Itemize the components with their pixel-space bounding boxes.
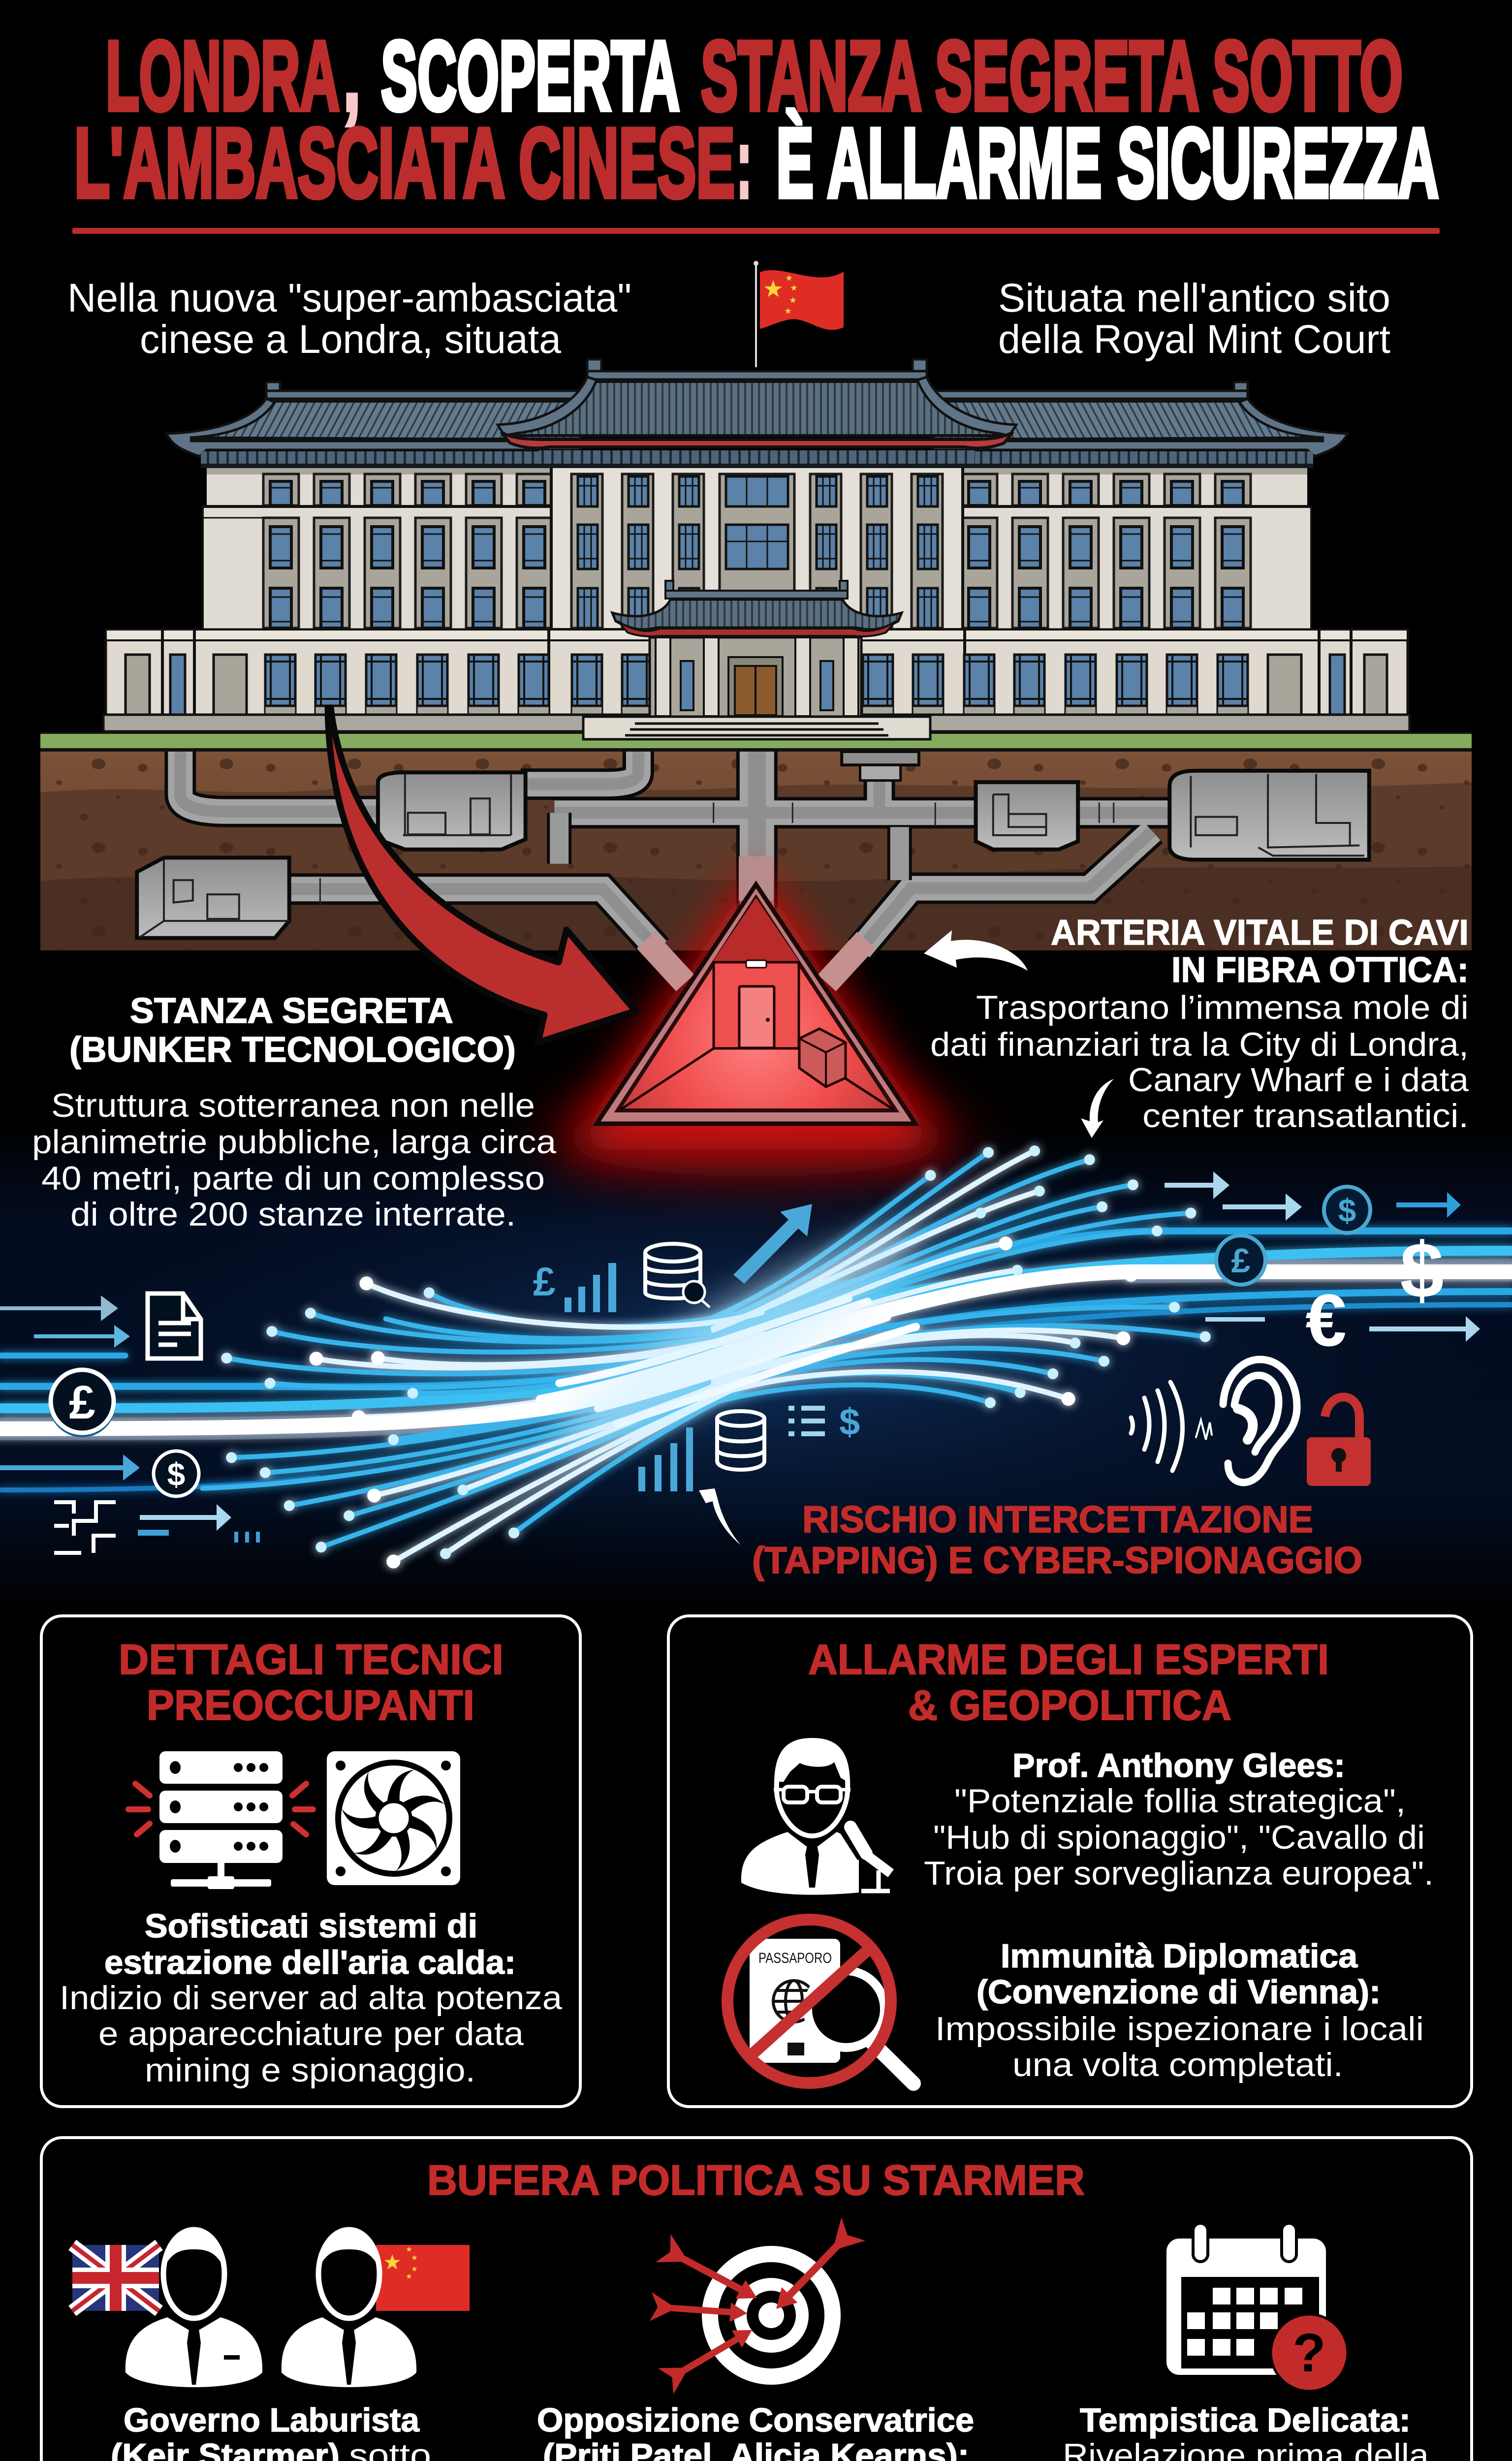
- roofs: [166, 359, 1348, 468]
- crate: [799, 1029, 846, 1087]
- icon: calendar with question mark: [1166, 2223, 1348, 2391]
- column: governo laburista: Governo Laburista: [124, 2401, 420, 2439]
- icon: large dollar: $: [1400, 1226, 1444, 1314]
- label: arteria fibra ottica: Trasportano l’immensa mole di: [976, 989, 1469, 1026]
- big red arrow to secret room: [328, 708, 635, 1042]
- icon: pound coin: £: [69, 1376, 95, 1429]
- arrow: curved white to pyramid: [924, 930, 1028, 971]
- panel: bufera politica: [41, 2138, 1472, 2461]
- icon: calendar with question mark: ?: [1292, 2323, 1326, 2383]
- portico and entrance: [583, 581, 930, 739]
- label: rischio intercettazione: [752, 1499, 1362, 1581]
- icon: pound coin: [1216, 1235, 1265, 1285]
- arrow: curved white down to fibres: [1081, 1079, 1114, 1138]
- icons: data glyphs centre bottom: [638, 1401, 860, 1491]
- column: tempistica delicata: Tempistica Delicata:: [1080, 2401, 1411, 2439]
- fibre section background: [0, 1122, 1512, 1614]
- secret room pyramid: [597, 884, 915, 1124]
- title: ,: [344, 21, 360, 131]
- icons: data flows left: [0, 1294, 260, 1553]
- label: stanza segreta: STANZA SEGRETA: [130, 991, 453, 1031]
- text: immunita: [935, 1937, 1424, 2083]
- text block: Indizio di server ad alta potenza: [60, 1979, 562, 2017]
- room interior: [621, 960, 893, 1109]
- text: prof glees: "Hub di spionaggio", "Cavallo di: [933, 1819, 1425, 1856]
- icon: server rack: [128, 1751, 313, 1889]
- tunnels: [137, 752, 1369, 949]
- icon: uk politician: [126, 2230, 262, 2387]
- icon: dollar coin: [154, 1451, 199, 1496]
- lower storey: [103, 630, 1410, 731]
- icon: prohibited passport and magnifier: PASSAPORO: [758, 1950, 832, 1966]
- upper wings: [203, 465, 1311, 630]
- text block: Sofisticati sistemi di: [145, 1907, 477, 1945]
- intro text left: [67, 276, 631, 362]
- icon: dollar coin: [1324, 1187, 1370, 1233]
- text block: [60, 1907, 562, 2089]
- heading: [808, 1636, 1329, 1729]
- heading: BUFERA POLITICA SU STARMER: [427, 2157, 1085, 2204]
- icon: china flag: [376, 2245, 470, 2311]
- icon: document: [148, 1294, 201, 1358]
- intro text left: cinese a Londra, situata: [140, 317, 561, 362]
- icon: target with arrows: [650, 2217, 865, 2394]
- heading: DETTAGLI TECNICI: [119, 1636, 504, 1683]
- label: arteria fibra ottica: [930, 913, 1469, 1135]
- sound waves: [1131, 1382, 1212, 1471]
- red glow around secret room: [569, 871, 943, 1149]
- label: rischio intercettazione: (TAPPING) E CYBER-SPIONAGGIO: [752, 1540, 1362, 1581]
- heading: & GEOPOLITICA: [908, 1682, 1231, 1729]
- icon: expert with microphone: [741, 1740, 891, 1895]
- label: arteria fibra ottica: dati finanziari tra la City di Londra,: [930, 1026, 1469, 1063]
- panel: allarme esperti: [668, 1616, 1472, 2107]
- icons: data glyphs centre top: [533, 1204, 812, 1312]
- text block: estrazione dell'aria calda:: [104, 1944, 516, 1981]
- arrow: curved white to tapping label: [699, 1488, 741, 1545]
- intro text right: della Royal Mint Court: [998, 317, 1390, 362]
- title: SCOPERTA: [381, 21, 680, 131]
- text: immunita: (Convenzione di Vienna):: [976, 1973, 1381, 2011]
- label: stanza segreta: di oltre 200 stanze interrate.: [70, 1196, 516, 1233]
- lock: [1307, 1397, 1371, 1486]
- title: LONDRA: [106, 21, 340, 131]
- icon: uk flag: [72, 2245, 159, 2311]
- intro text right: [998, 276, 1390, 362]
- icon: prohibited passport and magnifier: [727, 1920, 914, 2083]
- label: arteria fibra ottica: Canary Wharf e i data: [1128, 1061, 1469, 1099]
- icon: ear with sound waves and lock: [1131, 1359, 1371, 1486]
- label: arteria fibra ottica: IN FIBRA OTTICA:: [1171, 950, 1469, 990]
- intro text right: Situata nell'antico sito: [998, 276, 1390, 320]
- label: rischio intercettazione: RISCHIO INTERCETTAZIONE: [802, 1499, 1313, 1541]
- icon: rising arrow: [733, 1204, 812, 1284]
- embassy building: [103, 359, 1410, 739]
- text: immunita: una volta completati.: [1012, 2046, 1343, 2083]
- icon: data circuit glyph: [54, 1502, 116, 1553]
- label: stanza segreta: 40 metri, parte di un complesso: [41, 1160, 545, 1197]
- text: immunita: Immunità Diplomatica: [1001, 1937, 1358, 1975]
- soil and underground tunnels: [40, 752, 1472, 950]
- icons: currency and flow right: [1165, 1171, 1480, 1361]
- icon: database: [717, 1411, 764, 1470]
- icon: database with magnifier: [645, 1244, 710, 1307]
- grass strip: [40, 732, 1472, 752]
- label: stanza segreta: Struttura sotterranea non nelle: [51, 1087, 535, 1124]
- central block: [551, 465, 963, 630]
- column: tempistica delicata: [1046, 2401, 1447, 2461]
- title: :: [737, 108, 752, 218]
- text: prof glees: "Potenziale follia strategica",: [954, 1782, 1406, 1820]
- title: L'AMBASCIATA CINESE: [74, 108, 735, 218]
- icon: pound coin: [49, 1370, 116, 1437]
- text: prof glees: [924, 1747, 1434, 1892]
- icon: china politician: [282, 2230, 416, 2387]
- text: prof glees: Prof. Anthony Glees:: [1012, 1747, 1345, 1784]
- icon: dollar coin: $: [1338, 1192, 1356, 1229]
- icon: china flag on pole: [754, 261, 844, 367]
- label: stanza segreta: (BUNKER TECNOLOGICO): [69, 1030, 516, 1070]
- fibre optic cable bundle: [0, 1151, 1512, 1562]
- flow arrows left: [0, 1295, 260, 1543]
- icons: data glyphs centre bottom: $: [839, 1401, 860, 1443]
- heading: ALLARME DEGLI ESPERTI: [808, 1636, 1329, 1683]
- heading: PREOCCUPANTI: [147, 1682, 474, 1729]
- column: governo laburista: [111, 2401, 431, 2461]
- icon: dollar coin: $: [167, 1456, 185, 1492]
- intro text left: Nella nuova "super-ambasciata": [67, 276, 631, 320]
- icons: data glyphs centre top: £: [533, 1260, 556, 1304]
- text: immunita: Impossibile ispezionare i locali: [935, 2010, 1424, 2048]
- label: stanza segreta: planimetrie pubbliche, larga circa: [32, 1123, 556, 1161]
- column: opposizione conservatrice: [537, 2401, 974, 2461]
- column: opposizione conservatrice: Opposizione Conservatrice: [537, 2401, 974, 2439]
- text: prof glees: Troia per sorveglianza europea".: [924, 1855, 1434, 1892]
- heading: [119, 1636, 504, 1729]
- text block: e apparecchiature per data: [98, 2015, 524, 2052]
- label: arteria fibra ottica: ARTERIA VITALE DI CAVI: [1051, 913, 1469, 952]
- icon: euro: €: [1305, 1279, 1347, 1361]
- title: [74, 21, 1439, 218]
- maroon haze below secret room: [544, 1098, 968, 1176]
- tunnel ends entering secret room: [646, 856, 866, 983]
- label: arteria fibra ottica: center transatlantici.: [1142, 1097, 1469, 1135]
- panel: dettagli tecnici: [41, 1616, 580, 2107]
- text block: mining e spionaggio.: [145, 2051, 475, 2089]
- label: stanza segreta: [32, 991, 556, 1233]
- icon: fan: [327, 1751, 460, 1885]
- icon: pound coin: £: [1231, 1241, 1251, 1280]
- ear: [1223, 1359, 1297, 1483]
